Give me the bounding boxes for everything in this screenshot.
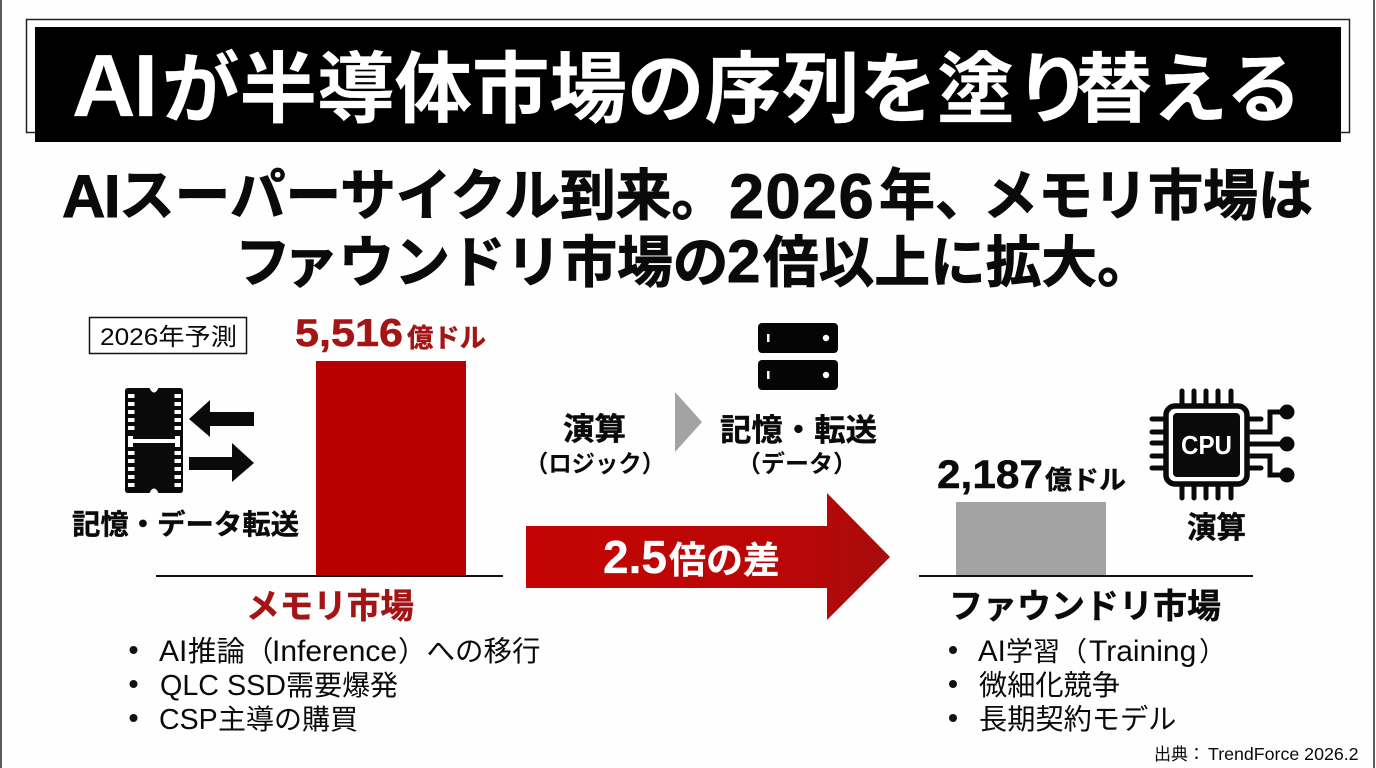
memory market bullets bbox=[130, 635, 541, 736]
bar: foundry market bbox=[956, 502, 1106, 576]
foundry market bullets: ） bbox=[1199, 637, 1226, 667]
subtitle: 年、 bbox=[879, 164, 991, 227]
icon: CPU bbox=[1152, 391, 1294, 498]
subtitle: フ bbox=[235, 232, 291, 294]
memory market bullets: QLC SSD bbox=[160, 670, 286, 702]
foundry market bullets: 微細化競争 bbox=[979, 669, 1120, 701]
title text: 替える bbox=[1076, 48, 1302, 133]
memory market bullets: Inference bbox=[272, 635, 397, 668]
subtitle: スーパーサイクル到来。 bbox=[119, 165, 727, 227]
arrow: 2.5x gap bbox=[526, 493, 890, 620]
icon: CPU: CPU bbox=[1181, 430, 1232, 460]
foundry value bbox=[937, 453, 1126, 497]
forecast label: 2026年予測 bbox=[100, 324, 237, 351]
foundry market bullets: AI bbox=[978, 635, 1006, 668]
foundry market bullets: 学習（ bbox=[1006, 637, 1087, 667]
foundry market bullets bbox=[949, 635, 1226, 735]
memory market bullets: 需要爆発 bbox=[286, 670, 398, 701]
foundry market bullets: 長期契約モデル bbox=[979, 703, 1176, 735]
logic label: （ロジック） bbox=[525, 451, 665, 478]
title banner bbox=[26, 20, 1350, 142]
subtitle: AI bbox=[62, 163, 119, 230]
title text: が半導体市場の序列を塗り bbox=[162, 47, 1092, 133]
memory transfer label: 記憶・転送 bbox=[720, 413, 877, 448]
icon: memory chip with arrows bbox=[125, 388, 254, 493]
subtitle: メモリ市場は bbox=[983, 165, 1313, 227]
arrow: 2.5x gap: 2.5 bbox=[603, 531, 667, 583]
forecast label bbox=[90, 318, 246, 354]
subtitle: 2 bbox=[727, 228, 760, 295]
memory transfer label bbox=[720, 413, 877, 478]
icon: gray chevron arrow bbox=[675, 392, 702, 452]
source note: TrendForce 2026.2 bbox=[1208, 744, 1359, 764]
CPU label: 演算 bbox=[1187, 512, 1246, 545]
foundry market heading: ファウンドリ市場 bbox=[949, 588, 1221, 626]
bar: memory market bbox=[316, 361, 466, 576]
subtitle: 倍以上に拡大。 bbox=[763, 232, 1153, 294]
subtitle: 2026 bbox=[729, 162, 875, 232]
memory market heading: メモリ市場 bbox=[246, 588, 414, 626]
arrow: 2.5x gap: 倍の差 bbox=[669, 540, 780, 581]
memory market bullets: ）への移行 bbox=[398, 636, 541, 668]
foundry value: 億ドル bbox=[1045, 465, 1126, 495]
memory transfer label: （データ） bbox=[737, 450, 857, 478]
source note: 出典： bbox=[1154, 745, 1205, 764]
memory market bullets: 主導の購買 bbox=[218, 704, 358, 735]
memory value bbox=[295, 312, 486, 355]
memory market bullets: 推論（ bbox=[188, 636, 274, 668]
foundry market bullets: Training bbox=[1089, 635, 1196, 668]
memory market bullets: CSP bbox=[159, 704, 218, 736]
foundry value: 2,187 bbox=[937, 453, 1043, 497]
memory icon label: 記憶・データ転送 bbox=[72, 508, 299, 540]
logic label: 演算 bbox=[563, 412, 626, 447]
logic label bbox=[525, 412, 665, 478]
memory market bullets: AI bbox=[159, 635, 187, 668]
subtitle bbox=[62, 162, 1313, 295]
title text: AI bbox=[72, 36, 156, 135]
icon: server bbox=[758, 323, 838, 390]
memory value: 5,516 bbox=[295, 312, 403, 355]
memory value: 億ドル bbox=[407, 323, 486, 353]
subtitle: ァウンドリ市場の bbox=[283, 232, 728, 294]
